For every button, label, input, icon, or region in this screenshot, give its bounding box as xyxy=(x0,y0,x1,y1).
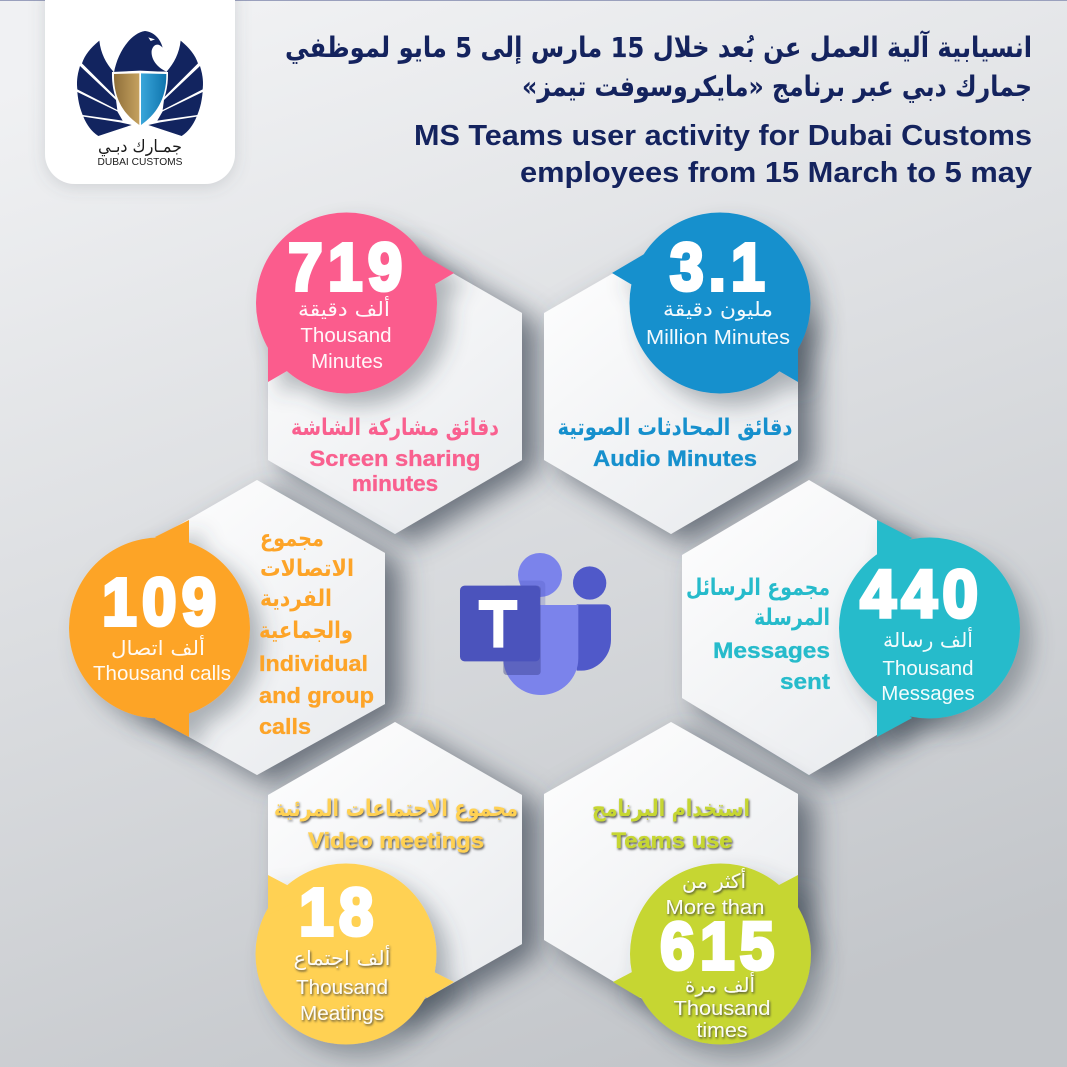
label: arabic and english: Video meetings xyxy=(308,828,484,853)
label: arabic and english: والجماعية xyxy=(259,618,353,644)
label: arabic: دقائق المحادثات الصوتية xyxy=(558,415,793,441)
panel: screen sharing minutes xyxy=(256,212,522,534)
panel: video meetings xyxy=(256,722,522,1044)
unit: arabic and english: ألف مرة xyxy=(685,972,755,997)
unit: arabic: ألف اتصال xyxy=(111,635,205,660)
unit: arabic: مليون دقيقة xyxy=(663,297,773,321)
title xyxy=(285,30,1032,189)
logo card xyxy=(45,0,235,184)
unit: arabic: ألف رسالة xyxy=(883,627,973,652)
unit: arabic and english: Thousand xyxy=(296,976,388,999)
callout: 109 thousand calls xyxy=(69,520,250,737)
label: arabic and english: calls xyxy=(259,714,311,739)
value: more than xyxy=(666,868,764,919)
label: arabic and english: sent xyxy=(780,669,831,694)
label: arabic and english xyxy=(259,526,374,739)
label: arabic and english: مجموع الرسائل xyxy=(686,575,830,601)
label: arabic and english: Teams use xyxy=(612,828,732,853)
panel: messages sent: Messages xyxy=(881,682,975,705)
unit: arabic: ألف دقيقة xyxy=(298,296,390,321)
callout: 3.1 million minutes xyxy=(612,212,810,394)
label: arabic and english: الفردية xyxy=(260,586,332,612)
label: arabic and english: Messages xyxy=(713,638,830,663)
english title line 2: employees from 15 March to 5 may xyxy=(520,157,1032,189)
logo wordmark arabic: جمـارك دبـي xyxy=(98,137,182,157)
callout: more than 615 thousand times xyxy=(613,864,811,1044)
label: arabic and english: Individual xyxy=(259,651,368,676)
label: arabic and english: and group xyxy=(259,683,374,708)
value: 3.1: 3.1 xyxy=(670,229,770,305)
label: arabic and english xyxy=(686,575,831,694)
unit: english: Thousand calls xyxy=(93,662,231,685)
unit: english: Thousand xyxy=(882,657,974,680)
value: 615: 615 xyxy=(660,909,780,984)
callout: 719 thousand minutes xyxy=(256,212,454,394)
label: arabic and english xyxy=(274,796,518,853)
label: arabic and english: استخدام البرنامج xyxy=(592,796,750,822)
panel: audio minutes xyxy=(544,212,810,534)
icon: Dubai Customs falcon emblem xyxy=(77,31,203,136)
label: arabic and english: الاتصالات xyxy=(260,556,354,582)
panel: screen sharing minutes: Minutes xyxy=(311,350,383,373)
logo wordmark english: DUBAI CUSTOMS xyxy=(98,156,182,168)
panel: individual and group calls xyxy=(69,480,385,775)
unit: english: Million Minutes xyxy=(646,326,790,349)
unit: arabic and english: times xyxy=(696,1019,748,1042)
label: arabic and english xyxy=(592,796,750,853)
value: 440: 440 xyxy=(860,557,984,631)
unit: arabic and english: Thousand xyxy=(674,997,770,1020)
value: 109: 109 xyxy=(102,565,222,640)
panel: screen sharing minutes: minutes xyxy=(352,471,438,496)
callout: 440 thousand messages xyxy=(839,520,1020,737)
unit: thousand minutes: Thousand xyxy=(300,324,392,347)
unit: arabic and english: ألف اجتماع xyxy=(294,945,390,970)
panel: messages sent xyxy=(682,480,1020,775)
panel: teams use xyxy=(544,722,811,1044)
unit: arabic and english xyxy=(294,945,390,1025)
value: 18: 18 xyxy=(299,875,379,950)
icon: Microsoft Teams logo xyxy=(460,553,611,695)
label: arabic and english: المرسلة xyxy=(754,605,830,631)
value: more than: More than xyxy=(666,896,764,919)
value: 719: 719 xyxy=(288,230,408,305)
callout: 18 thousand meetings xyxy=(256,864,454,1044)
value: more than: أكثر من xyxy=(682,868,746,893)
label: arabic and english: مجموع xyxy=(260,526,324,552)
label: arabic and english: مجموع الاجتماعات المرئية xyxy=(274,796,518,822)
label: english: Screen sharing xyxy=(310,446,480,471)
label: english: Audio Minutes xyxy=(593,446,757,471)
unit: arabic and english xyxy=(674,972,770,1042)
unit: arabic and english: Meatings xyxy=(300,1002,384,1025)
english title line 1: MS Teams user activity for Dubai Customs xyxy=(414,120,1032,152)
label: arabic: دقائق مشاركة الشاشة xyxy=(291,415,499,441)
